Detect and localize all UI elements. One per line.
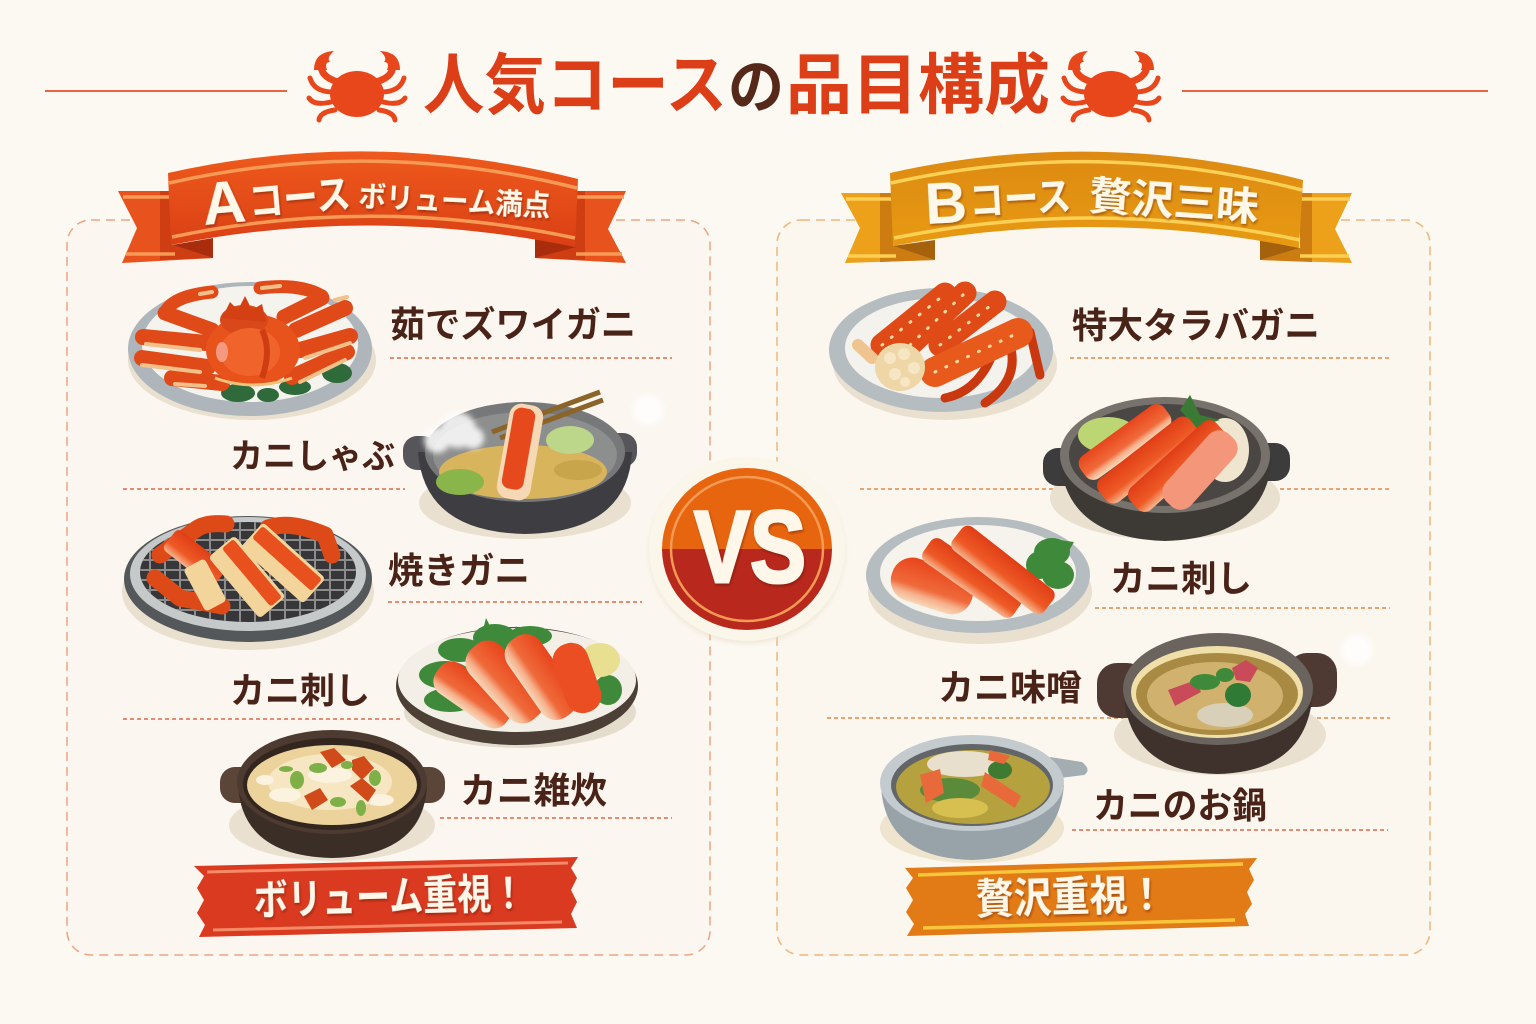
ribbon text: B letter: B — [923, 170, 969, 237]
badge: VS — [649, 457, 845, 643]
ribbon text: course: コース — [247, 172, 352, 225]
dish: crab hotpot bowl — [880, 735, 1088, 863]
dish: crab shabu — [403, 392, 663, 539]
banner text: luxury focus: 贅沢重視！ — [975, 871, 1166, 923]
label: crab hotpot bowl: カニのお鍋 — [1093, 785, 1267, 826]
label: crab shabu: カニしゃぶ — [230, 438, 395, 476]
title — [309, 48, 1159, 122]
dish: giant king crab — [829, 288, 1057, 420]
title: red part two: 品目構成 — [786, 48, 1050, 122]
ribbon text: course: コース — [968, 175, 1072, 224]
title: red part one: 人気コース — [423, 48, 727, 122]
ribbon text: luxury: 贅沢三昧 — [1087, 174, 1260, 230]
banner text: volume focus: ボリューム重視！ — [253, 870, 526, 924]
label: crab rice porridge: カニ雑炊 — [460, 770, 607, 811]
dish: crab rice porridge — [220, 730, 445, 861]
icon: crab left — [309, 51, 405, 120]
ribbon: A course header — [118, 151, 626, 263]
banner: luxury focus — [905, 858, 1257, 936]
panel: B course — [777, 220, 1430, 955]
title: particle: の — [728, 54, 784, 121]
dish: grilled crab — [122, 516, 374, 650]
dish: crab sashimi A — [396, 618, 638, 748]
label: crab sashimi A: カニ刺し — [230, 670, 370, 711]
label: grilled crab: 焼きガニ — [388, 550, 530, 591]
dish: boiled snow crab — [128, 282, 376, 420]
badge text: VS — [694, 490, 806, 604]
label: crab sashimi B: カニ刺し — [1110, 558, 1252, 599]
banner: volume focus — [194, 857, 578, 937]
label: giant king crab: 特大タラバガニ — [1072, 305, 1320, 346]
dish: luxury crab on hotpot — [1043, 395, 1290, 541]
panel: A course — [67, 220, 710, 955]
dish: crab sashimi B — [866, 517, 1092, 644]
label: crab miso: カニ味噌 — [938, 667, 1082, 708]
ribbon text: A letter: A — [199, 167, 248, 238]
ribbon text: volume: ボリューム満点 — [358, 180, 551, 223]
dish: crab miso — [1097, 633, 1372, 775]
icon: crab right — [1063, 51, 1159, 120]
label: boiled snow crab: 茹でズワイガニ — [390, 304, 636, 345]
ribbon: B course header — [841, 152, 1352, 263]
